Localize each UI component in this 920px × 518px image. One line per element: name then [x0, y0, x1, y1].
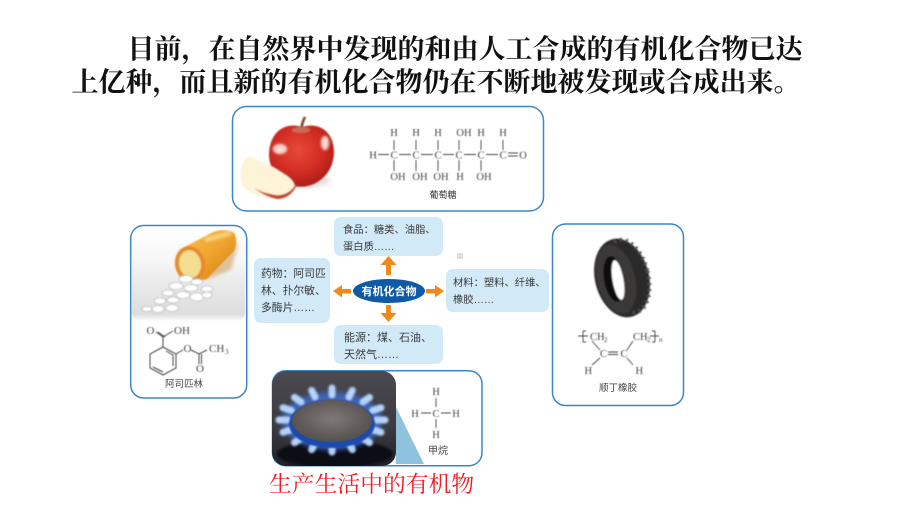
glucose structural formula: H	[456, 172, 464, 183]
cis-polybutadiene structural formula: CH	[633, 332, 648, 343]
aspirin structural formula: O	[196, 363, 204, 375]
box: medicine: 多酶片……	[261, 300, 315, 314]
cis-polybutadiene structural formula: C	[620, 349, 628, 360]
box: energy: 天然气……	[344, 347, 399, 361]
glucose structural formula: H	[390, 128, 398, 139]
aspirin structural formula: CH	[209, 343, 224, 355]
methane structural formula: C	[432, 409, 440, 420]
panel: energy, methane	[272, 371, 482, 468]
cis-polybutadiene structural formula: C	[600, 349, 607, 360]
methane structural formula: H	[452, 409, 460, 420]
caption: 生产生活中的有机物	[269, 472, 474, 497]
cis-polybutadiene structural formula: CH	[590, 332, 605, 343]
label: aspirin: 阿司匹林	[165, 378, 203, 390]
box: food: 食品：糖类、油脂、	[343, 223, 436, 236]
box: medicine: 药物：阿司匹	[261, 266, 326, 280]
glucose structural formula: C	[412, 150, 420, 162]
glucose structural formula: O	[519, 150, 527, 162]
glucose structural formula: OH	[390, 172, 406, 183]
label: glucose: 葡萄糖	[429, 189, 457, 200]
aspirin structural formula	[146, 325, 229, 375]
glucose structural formula: C	[390, 150, 398, 162]
box: food	[334, 217, 443, 256]
methane structural formula: H	[411, 409, 419, 420]
intro line 1: 目前，在自然界中发现的和由人工合成的有机化合物已达	[128, 34, 804, 66]
glucose structural formula: H	[477, 128, 485, 139]
glucose structural formula: H	[412, 128, 420, 139]
arrow: left	[333, 285, 351, 298]
glucose structural formula	[369, 128, 527, 183]
glucose structural formula: H	[434, 128, 442, 139]
panel: materials, tire	[552, 224, 684, 406]
organic compounds infographic	[72, 35, 802, 494]
aspirin structural formula: OH	[174, 325, 190, 337]
arrow: down	[380, 305, 396, 322]
glucose structural formula: C	[477, 150, 485, 162]
glucose structural formula: OH	[476, 172, 492, 183]
aspirin structural formula: O	[184, 343, 192, 355]
methane structural formula: H	[432, 430, 440, 441]
glucose structural formula: H	[369, 150, 377, 162]
methane structural formula: H	[432, 387, 440, 398]
box: energy: 能源：煤、石油、	[344, 330, 432, 344]
glucose structural formula: C	[499, 150, 507, 162]
photo: tire	[586, 233, 658, 323]
photo: pill bottle	[132, 228, 245, 321]
box: medicine	[254, 258, 330, 323]
glucose structural formula: H	[499, 128, 507, 139]
glucose structural formula: OH	[456, 128, 472, 139]
intro paragraph heading	[72, 34, 804, 98]
central ellipse label: 有机化合物	[362, 284, 416, 298]
box: food: 蛋白质……	[343, 240, 394, 253]
glucose structural formula: C	[434, 150, 442, 162]
glucose structural formula: C	[455, 150, 463, 162]
photo: gas flame	[272, 371, 396, 468]
cis-polybutadiene structural formula	[578, 331, 663, 377]
box: energy	[334, 325, 443, 364]
wedge pointer	[395, 405, 424, 464]
glucose structural formula: OH	[412, 172, 428, 183]
box: materials: 材料：塑料、纤维、	[453, 276, 546, 289]
central ellipse label	[353, 279, 425, 303]
cis-polybutadiene structural formula: 2	[604, 336, 608, 344]
cis-polybutadiene structural formula: n	[659, 336, 663, 344]
box: materials: 橡胶……	[453, 293, 494, 306]
aspirin structural formula: 3	[225, 348, 229, 356]
glucose structural formula: OH	[433, 172, 449, 183]
panel: medicine, aspirin	[131, 226, 247, 398]
icon: apple photo	[241, 117, 334, 199]
box: materials	[446, 269, 549, 312]
cis-polybutadiene structural formula: H	[584, 366, 592, 377]
label: methane: 甲烷	[428, 444, 448, 457]
intro line 2: 上亿种，而且新的有机化合物仍在不断地被发现或合成出来。	[72, 68, 800, 98]
cis-polybutadiene structural formula: H	[636, 366, 644, 377]
arrow: up	[380, 256, 396, 275]
label: cis-polybutadiene rubber: 顺丁橡胶	[599, 382, 637, 394]
methane structural formula	[411, 387, 460, 441]
central diagram: organic compounds	[254, 217, 549, 364]
cis-polybutadiene structural formula: 2	[647, 336, 651, 344]
panel: food, apple and glucose	[232, 106, 544, 211]
box: medicine: 林、扑尔敏、	[261, 283, 326, 297]
aspirin structural formula: O	[146, 325, 154, 337]
arrow: right	[426, 285, 444, 298]
